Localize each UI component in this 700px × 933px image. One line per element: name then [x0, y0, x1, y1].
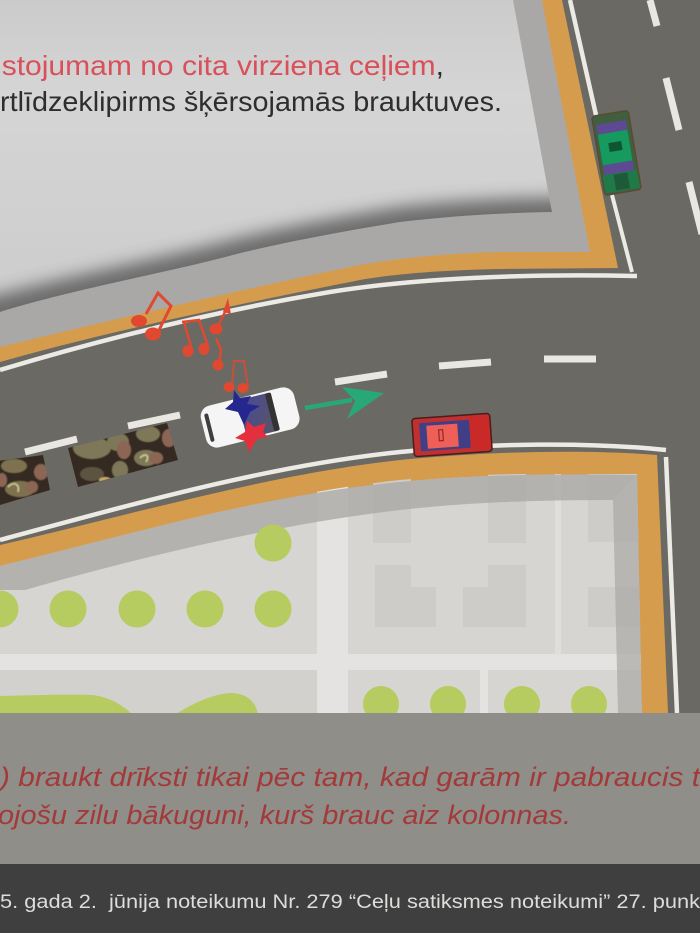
- convoy truck right: [68, 423, 178, 487]
- orange kerb upper block: [0, 0, 618, 362]
- translucent pavement top strip: [0, 475, 637, 590]
- source citation: 5. gada 2. jūnija noteikumu Nr. 279 “Ceļu satiksmes noteikumi” 27. punk: [0, 892, 700, 913]
- light plan base: [0, 475, 642, 713]
- lane dashes: [25, 0, 700, 452]
- red beacon: [235, 421, 268, 452]
- note three: [210, 298, 231, 334]
- heading text: [0, 50, 502, 117]
- red car: [412, 413, 492, 457]
- green car: [592, 110, 641, 195]
- convoy truck left: [0, 455, 50, 505]
- panel fold shadow: [0, 214, 580, 320]
- rule text second line: ojošu zilu bākuguni, kurš brauc aiz kolonnas.: [0, 800, 571, 830]
- road edge lines upper: [0, 0, 637, 370]
- footer source band: [0, 864, 700, 933]
- note one: [131, 293, 171, 340]
- building blocks: [373, 474, 640, 627]
- lower block: pavement, kerb, city plan: [0, 452, 668, 722]
- blue beacon: [225, 390, 260, 425]
- note five: [224, 361, 248, 393]
- car body: [198, 385, 302, 450]
- info band: [0, 713, 700, 864]
- translucent pavement right strip: [613, 475, 642, 713]
- white streets: [0, 474, 645, 713]
- grey pavement upper block: [0, 0, 590, 347]
- building blocks and streets: [0, 474, 645, 713]
- rule text: ) braukt drīksti tikai pēc tam, kad garām ir pabraucis t: [0, 762, 700, 792]
- note two: [182, 320, 210, 357]
- orange kerb lower block: [0, 452, 668, 713]
- trees: [0, 524, 607, 722]
- note four: [212, 338, 224, 370]
- heading text: rtlīdzeklipirms šķērsojamās brauktuves.: [0, 86, 502, 117]
- direction arrow: [305, 387, 384, 419]
- road edge lines lower: [0, 445, 677, 713]
- music notes: [131, 293, 248, 393]
- upper block: pavement, kerb and text panel: [0, 0, 618, 362]
- light text panel: [0, 0, 552, 312]
- police car with beacons: [198, 385, 302, 452]
